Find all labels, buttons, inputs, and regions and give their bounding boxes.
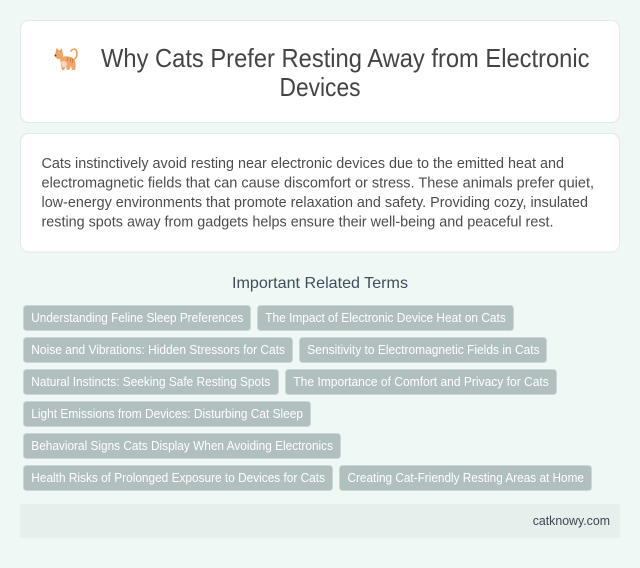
- text block: description: electromagnetic fields that can cause discomfort or stress. These animals prefer quiet,: [42, 174, 594, 192]
- text block: description: [42, 155, 594, 230]
- title: [101, 43, 590, 102]
- text block: description: resting spots away from gadgets helps ensure their well-being and peaceful rest.: [42, 214, 554, 230]
- chip: [340, 466, 592, 490]
- chip: Noise and Vibrations: Hidden Stressors for Cats: [31, 342, 285, 357]
- chip: Behavioral Signs Cats Display When Avoiding Electronics: [31, 438, 333, 453]
- panel: description card: [20, 134, 620, 252]
- chip: Health Risks of Prolonged Exposure to Devices for Cats: [31, 470, 325, 485]
- text block: description: Cats instinctively avoid resting near electronic devices due to the emitted heat and: [42, 155, 564, 172]
- chip: [258, 306, 514, 330]
- chip: [24, 466, 332, 490]
- chip: [24, 402, 310, 426]
- chip: Creating Cat-Friendly Resting Areas at Home: [348, 470, 584, 485]
- chip: [24, 306, 250, 330]
- chip: [300, 338, 546, 362]
- chip: [286, 370, 556, 394]
- heading: related terms: Important Related Terms: [232, 275, 408, 292]
- chip: The Impact of Electronic Device Heat on Cats: [265, 310, 506, 325]
- footer: site name: catknowy.com: [533, 514, 610, 528]
- panel: term chips: [24, 306, 592, 490]
- panel: title card: [20, 20, 620, 122]
- title: Devices: [280, 72, 360, 102]
- icon: cat: [54, 48, 77, 70]
- text block: description: low-energy environments that promote relaxation and safety. Providing cozy, insulated: [42, 194, 588, 211]
- chip: Light Emissions from Devices: Disturbing Cat Sleep: [31, 406, 303, 421]
- footer: [20, 504, 620, 538]
- chip: Natural Instincts: Seeking Safe Resting Spots: [31, 374, 271, 389]
- chip: The Importance of Comfort and Privacy for Cats: [293, 374, 549, 389]
- title: Why Cats Prefer Resting Away from Electronic: [101, 43, 590, 73]
- chip: Sensitivity to Electromagnetic Fields in Cats: [307, 342, 540, 357]
- chip: [24, 338, 292, 362]
- chip: [24, 370, 278, 394]
- chip: [24, 434, 340, 458]
- chip: Understanding Feline Sleep Preferences: [31, 310, 244, 325]
